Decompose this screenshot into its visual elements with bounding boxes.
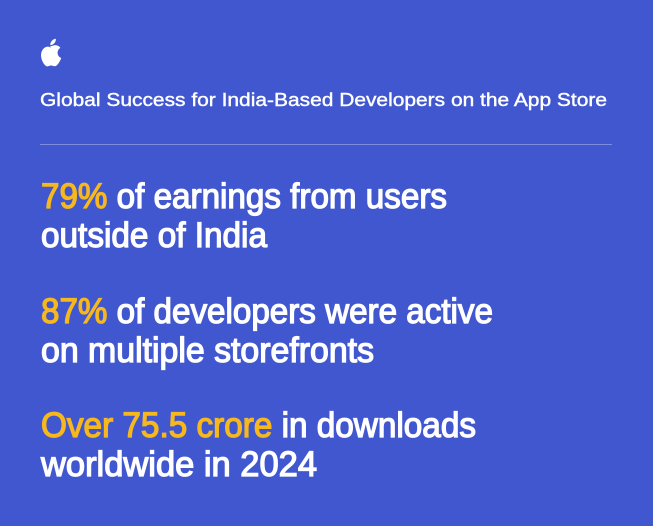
icon: apple logo: [41, 39, 61, 66]
title: Global Success for India-Based Developers on the App Store: [40, 90, 607, 110]
stat 1: [41, 177, 447, 255]
stat 1: 79% of earnings from users: [41, 177, 447, 216]
stat 2: 87% of developers were active: [41, 292, 493, 331]
stat 2: [41, 292, 493, 370]
stat 1: outside of India: [41, 216, 267, 255]
stat 3: Over 75.5 crore in downloads: [41, 406, 476, 445]
stat 3: worldwide in 2024: [40, 445, 317, 484]
stat 2: on multiple storefronts: [41, 331, 374, 370]
stat 3: [40, 406, 476, 484]
